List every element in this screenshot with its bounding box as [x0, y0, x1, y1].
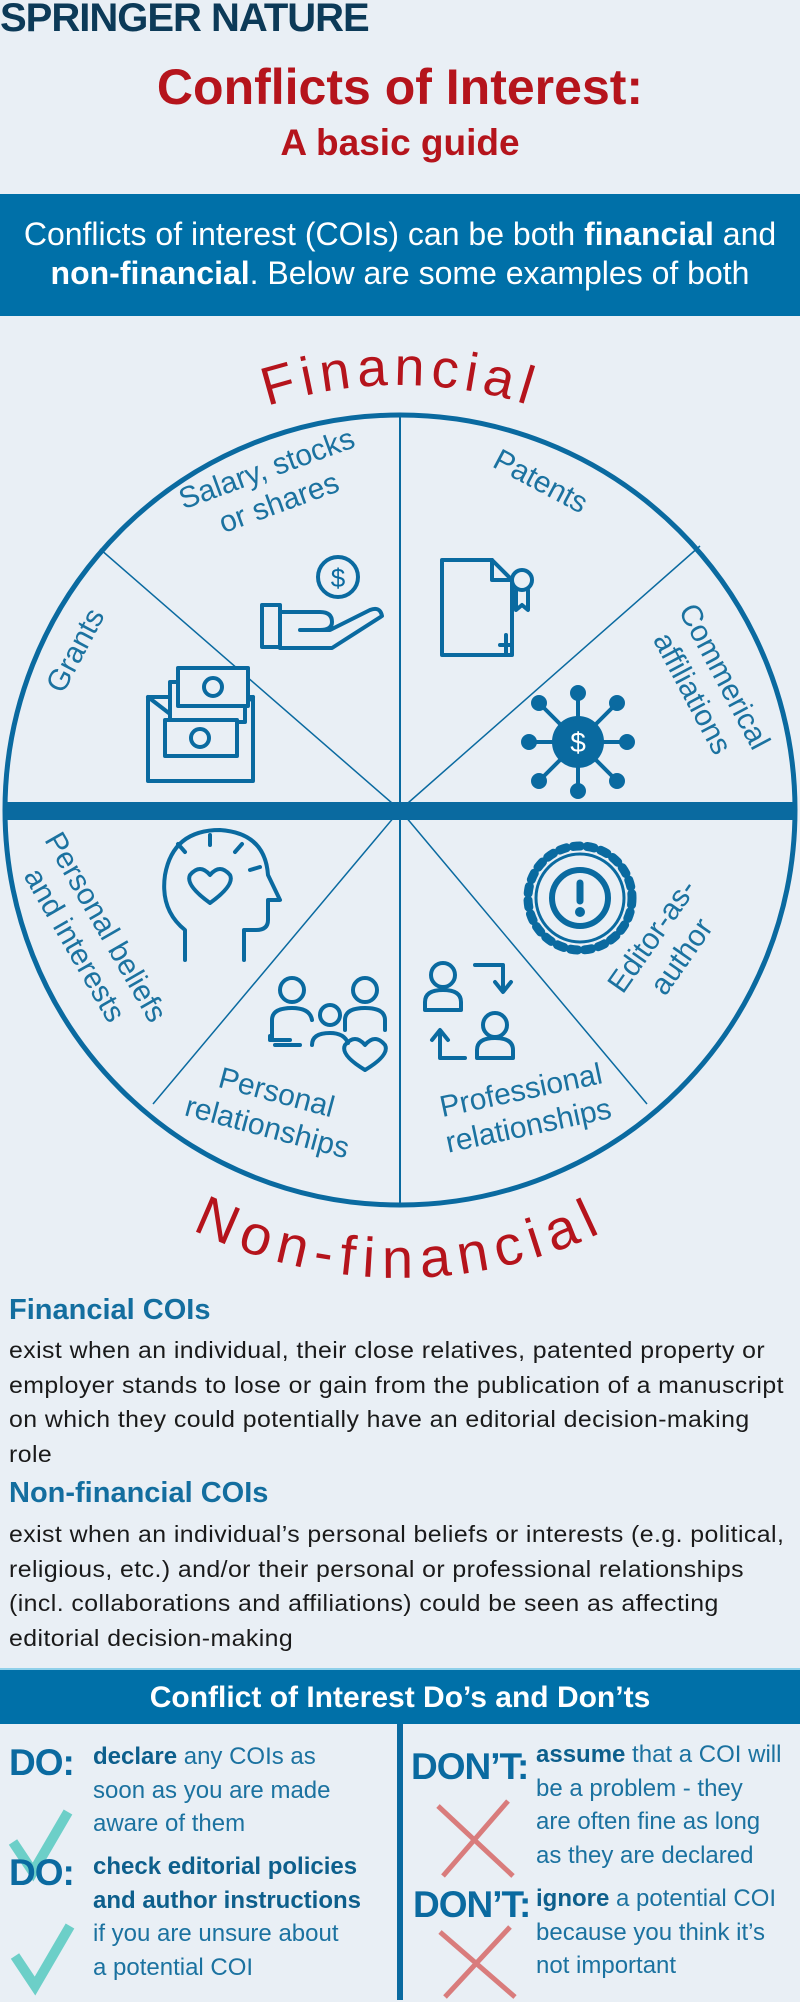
segment labels: Patents — [488, 443, 593, 520]
segment labels: author — [644, 912, 720, 1001]
segment labels: relationships — [182, 1090, 353, 1165]
text: non-financial definition: editorial decision-making — [9, 1624, 293, 1650]
dont 1: as they are declared — [536, 1842, 753, 1868]
icon: head with heart — [164, 830, 280, 960]
dont 1: DON’T: — [411, 1746, 528, 1787]
do 2: DO: — [9, 1852, 74, 1893]
text: non-financial definition: (incl. collaborations and affiliations) could be seen as affecting — [9, 1590, 719, 1616]
title: Conflicts of Interest: — [157, 59, 643, 115]
intro band: Conflicts of interest (COIs) can be both financial and — [24, 216, 776, 252]
text: non-financial definition — [9, 1521, 784, 1651]
circle — [5, 415, 795, 1205]
icon: hand with coin — [262, 557, 382, 648]
segment labels: relationships — [443, 1092, 614, 1160]
do 1: aware of them — [93, 1810, 245, 1837]
icon: check — [10, 1924, 74, 1996]
intro band: non-financial. Below are some examples of both — [51, 255, 749, 291]
segment labels: Editor-as- — [601, 873, 703, 999]
intro band — [0, 194, 800, 316]
segment labels: Salary, stocks — [174, 422, 359, 516]
text: financial definition: role — [9, 1440, 52, 1466]
do 2 — [9, 1852, 361, 1996]
text: non-financial definition: religious, etc.) and/or their personal or professional relationships — [9, 1556, 744, 1582]
segment labels — [7, 422, 776, 1165]
heading: Financial: Financial — [261, 352, 536, 405]
do 2: a potential COI — [93, 1954, 253, 1980]
dont 1: be a problem - they — [536, 1774, 743, 1802]
icon: hand with coin: $ — [331, 563, 346, 593]
do 1: soon as you are made — [93, 1776, 330, 1804]
text: financial definition: exist when an individual, their close relatives, patented property or — [9, 1337, 765, 1363]
dont 2: not important — [536, 1952, 676, 1979]
heading: Non-financial COIs: Non-financial COIs — [9, 1477, 268, 1509]
heading: Non-financial: Non-financial — [196, 1196, 598, 1278]
text: financial definition: employer stands to lose or gain from the publication of a manuscript — [9, 1372, 784, 1398]
icon: envelope with money — [148, 668, 253, 781]
text: non-financial definition: exist when an individual’s personal beliefs or interests (e.g. political, — [9, 1521, 784, 1547]
icon: gear exclamation — [528, 846, 632, 950]
text: financial definition: on which they could potentially have an editorial decision-making — [9, 1406, 750, 1432]
do 2: and author instructions — [93, 1886, 361, 1914]
segment labels: Professional — [437, 1057, 605, 1124]
do 2: check editorial policies — [93, 1853, 357, 1880]
segment labels: affiliations — [646, 627, 738, 760]
dont 1: are often fine as long — [536, 1808, 760, 1835]
icon: family — [270, 978, 386, 1070]
icon: cross — [436, 1800, 515, 1878]
dont 2: ignore a potential COI — [536, 1885, 776, 1912]
wheel diagram — [2, 352, 798, 1278]
dont 2 — [413, 1884, 776, 1999]
icons — [148, 557, 633, 1070]
dont 1 — [411, 1741, 781, 1878]
icon: network dollar: $ — [570, 727, 586, 758]
do 1: DO: — [9, 1742, 74, 1783]
dont 1: assume that a COI will — [536, 1741, 781, 1768]
subtitle: A basic guide — [280, 122, 520, 163]
segment labels: Grants — [40, 603, 111, 698]
dos and donts band: Conflict of Interest Do’s and Don’ts — [150, 1681, 650, 1714]
icon: professional arrows — [425, 963, 513, 1058]
dont 2: DON’T: — [413, 1884, 530, 1925]
segment labels: Personal beliefs — [38, 827, 173, 1028]
segment labels: Personal — [215, 1062, 338, 1124]
segment labels: and interests — [17, 863, 131, 1028]
icon: patent document — [442, 560, 532, 655]
segment labels: Commerical — [672, 598, 776, 755]
dos and donts band — [0, 1668, 800, 1724]
icon: network dollar — [523, 687, 633, 797]
do 1 — [8, 1742, 330, 1882]
icon: check — [8, 1810, 72, 1882]
dont 2: because you think it’s — [536, 1918, 765, 1946]
heading: Financial COIs: Financial COIs — [9, 1294, 210, 1326]
do 2: if you are unsure about — [93, 1920, 338, 1947]
segment labels: or shares — [215, 466, 343, 540]
do 1: declare any COIs as — [93, 1743, 316, 1770]
text: financial definition — [9, 1337, 784, 1466]
icon: cross — [438, 1925, 516, 1999]
